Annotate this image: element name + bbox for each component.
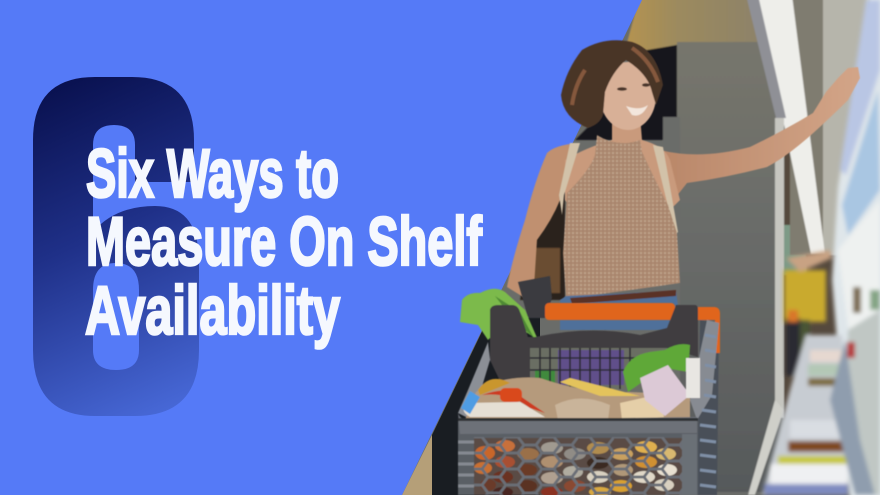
basket ribs [458,442,474,486]
eyes [617,83,650,91]
dark handle plate [490,305,698,381]
blouse [563,135,680,298]
lower basket [458,420,698,495]
groceries [461,344,700,420]
big numeral 6 [33,77,199,416]
phone handle [518,276,552,318]
hair highlight [572,48,658,105]
hair [561,40,663,128]
right arm and hand [660,67,860,197]
title [85,135,483,349]
title line 2: Measure On Shelf [86,203,483,280]
basket rim [458,413,697,434]
orange handle [545,303,720,353]
title line 1: Six Ways to [86,135,339,212]
cart back side and mesh [697,320,719,495]
front basket frame [458,342,490,420]
backpack straps [559,143,678,235]
photo: woman [507,40,860,330]
neck and shoulders [565,115,680,240]
purple wire view [530,345,670,389]
left arm [507,143,578,303]
side mesh [700,335,716,487]
lettuce left [460,289,538,340]
belt and jeans [560,290,680,330]
photo: supermarket background [400,0,880,495]
face [600,62,656,130]
smile [626,105,648,116]
food seen through mesh [474,437,696,495]
blue background panel [0,0,642,495]
title line 3: Availability [85,272,340,349]
photo: shopping cart [458,276,720,495]
